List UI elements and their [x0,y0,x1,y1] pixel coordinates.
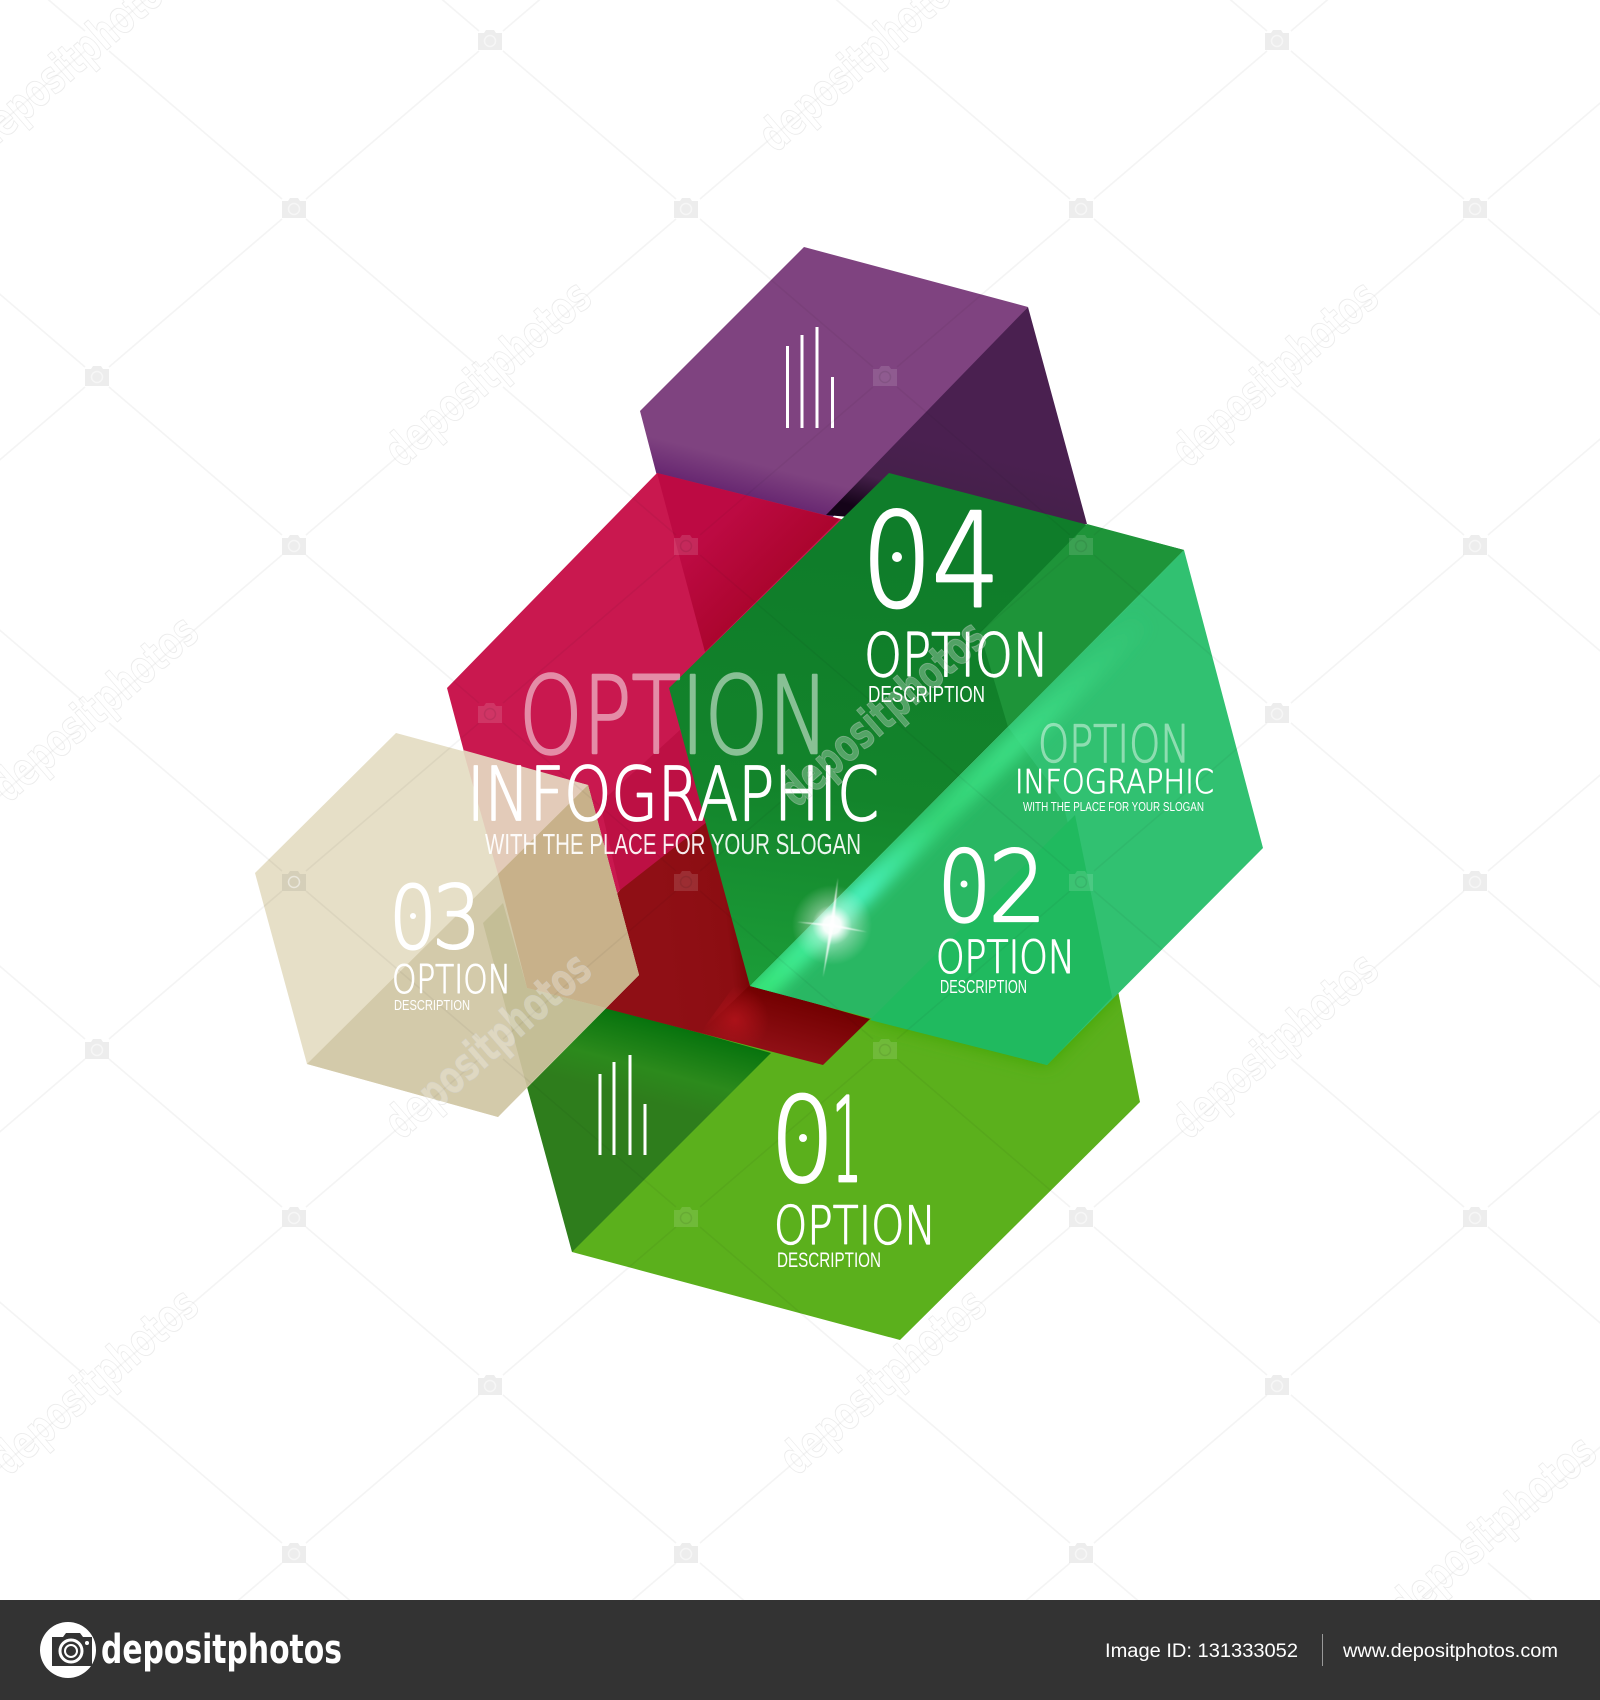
option 04 text: OPTION [864,621,1049,691]
watermark wordmarks: depositphotos [769,1277,996,1485]
option 01 text: 1 [832,1072,862,1209]
watermark wordmarks: depositphotos [374,269,601,477]
watermark cameras [85,30,1487,1563]
option 04 text [862,485,1049,707]
option 02 text: 0 [937,831,992,945]
secondary title block: INFOGRAPHIC [1015,762,1214,801]
watermark wordmarks: depositphotos [769,609,996,817]
hexagon: beige panel 03 [255,733,639,1117]
watermark wordmarks: depositphotos [1161,269,1388,477]
lens flare [792,878,872,977]
hexagon: green panel with options 04 and 02 [669,473,1263,1065]
watermark wordmarks: depositphotos [1161,941,1388,1149]
hexagon: purple top panel [640,247,1087,530]
footer logo [40,1622,342,1678]
option 04 text: DESCRIPTION [868,681,985,707]
option 01 text: OPTION [774,1196,936,1257]
option 03 text [389,867,511,1014]
option 02 text [936,831,1075,997]
option 02 text: 2 [988,831,1047,945]
option 04 text: 4 [932,485,1000,637]
footer bar [0,1600,1600,1700]
option 03 text: 3 [432,867,481,969]
watermark wordmarks: depositphotos [374,941,601,1149]
title block: INFOGRAPHIC [467,752,879,838]
title block [467,655,879,861]
footer website: www.depositphotos.com [1342,1641,1558,1662]
option 03 text: DESCRIPTION [394,997,470,1014]
option 04 text: 0 [862,485,932,637]
option 02 text: OPTION [936,931,1075,984]
option 03 text: OPTION [392,958,511,1003]
secondary title block: OPTION [1038,715,1190,775]
hexagon: lime green panel 01 [527,993,1140,1340]
secondary title block: WITH THE PLACE FOR YOUR SLOGAN [1023,800,1204,814]
title block: WITH THE PLACE FOR YOUR SLOGAN [485,829,861,861]
icon: green bars [598,1055,646,1155]
footer logo: depositphotos [101,1627,342,1673]
option 01 text: DESCRIPTION [777,1249,881,1272]
icon: purple bars [786,327,834,428]
secondary title block [1015,715,1214,814]
option 01 text [598,1055,936,1272]
option 03 text: 0 [389,867,437,969]
option 02 text: DESCRIPTION [940,977,1027,997]
hexagon: crimson panel [447,473,870,1065]
light streak [750,661,1100,995]
footer image id: Image ID: 131333052 [1105,1641,1298,1662]
option 01 text: 0 [770,1072,835,1209]
title block: OPTION [519,655,829,779]
